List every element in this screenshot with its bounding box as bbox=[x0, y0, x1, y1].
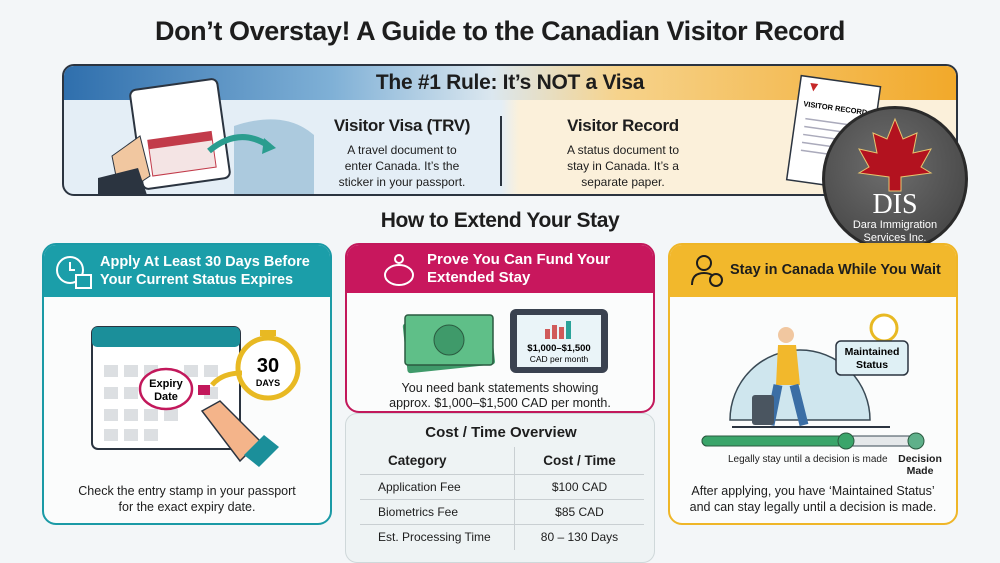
caption: approx. $1,000–$1,500 CAD per month. bbox=[389, 396, 611, 410]
text: visitor visa: A travel document to bbox=[347, 143, 457, 157]
icon: person check bbox=[691, 255, 723, 287]
text: visitor record: stay in Canada. It’s a bbox=[567, 159, 679, 173]
progress labels: Legally stay until a decision is made bbox=[728, 454, 888, 465]
text: visitor visa: Visitor Visa (TRV) bbox=[334, 116, 470, 135]
title: Don’t Overstay! A Guide to the Canadian Visitor Record bbox=[155, 16, 845, 46]
banner heading bbox=[64, 66, 956, 100]
table: $85 CAD bbox=[555, 505, 604, 519]
caption: and can stay legally until a decision is made. bbox=[690, 500, 936, 514]
table: Biometrics Fee bbox=[378, 505, 458, 519]
header: Apply At Least 30 Days Before bbox=[100, 254, 310, 270]
illustration: calendar with stopwatch: 30 bbox=[257, 355, 279, 377]
panel: prove funds bbox=[345, 243, 655, 413]
header bbox=[44, 245, 330, 297]
text: visitor visa: sticker in your passport. bbox=[339, 175, 465, 189]
text: visitor visa: enter Canada. It’s the bbox=[345, 159, 459, 173]
text: visitor record: separate paper. bbox=[581, 175, 665, 189]
illustration: visitor record document: VISITOR RECORD bbox=[803, 99, 868, 117]
header bbox=[347, 245, 653, 293]
logo: Dara Immigration Services: DIS bbox=[872, 189, 918, 220]
header: Your Current Status Expires bbox=[100, 272, 293, 288]
caption: You need bank statements showing bbox=[402, 381, 598, 395]
panel: the #1 rule banner bbox=[62, 64, 958, 196]
illustration: money and tablet: $1,000–$1,500 bbox=[527, 343, 591, 354]
illustration: calendar with stopwatch: Expiry bbox=[149, 378, 184, 390]
panel: stay while you wait: Made bbox=[907, 465, 933, 477]
text: visitor visa bbox=[334, 116, 470, 189]
caption bbox=[389, 381, 611, 410]
table bbox=[360, 447, 644, 550]
caption: Check the entry stamp in your passport bbox=[78, 484, 296, 498]
header: Stay in Canada While You Wait bbox=[730, 262, 941, 278]
logo: Dara Immigration Services bbox=[822, 106, 968, 252]
header bbox=[670, 245, 956, 297]
illustration: traveller under dome: Status bbox=[856, 359, 888, 371]
caption bbox=[78, 484, 296, 514]
logo: Dara Immigration Services: Services Inc. bbox=[864, 232, 926, 244]
illustration: calendar with stopwatch: Date bbox=[154, 391, 178, 403]
heading: how to extend: How to Extend Your Stay bbox=[381, 209, 619, 232]
progress bar bbox=[702, 432, 924, 450]
table: Application Fee bbox=[378, 480, 461, 494]
logo: Dara Immigration Services: Dara Immigration bbox=[853, 219, 937, 231]
icon: piggy bank bbox=[384, 254, 414, 286]
panel: cost / time overview table: Cost / Time Overview bbox=[425, 424, 577, 441]
table: Est. Processing Time bbox=[378, 530, 491, 544]
header: Extended Stay bbox=[427, 269, 530, 286]
illustration: money and tablet bbox=[402, 309, 608, 374]
table: Category bbox=[388, 453, 447, 468]
text: visitor record: Visitor Record bbox=[567, 116, 679, 135]
text: visitor record bbox=[567, 116, 679, 189]
table: Cost / Time bbox=[543, 453, 616, 468]
illustration: calendar with stopwatch bbox=[91, 326, 300, 467]
illustration: money and tablet: CAD per month bbox=[530, 354, 589, 364]
illustration: traveller under dome: Maintained bbox=[845, 346, 899, 358]
table: $100 CAD bbox=[552, 480, 607, 494]
caption: After applying, you have ‘Maintained Status’ bbox=[691, 484, 935, 498]
panel: cost / time overview table bbox=[345, 413, 655, 563]
caption: for the exact expiry date. bbox=[119, 500, 255, 514]
panel: stay while you wait bbox=[668, 243, 958, 525]
illustration: traveller under dome bbox=[729, 314, 909, 428]
illustration: visitor record document bbox=[786, 74, 882, 186]
header: Prove You Can Fund Your bbox=[427, 251, 610, 268]
illustration: passport with visa and Canada map bbox=[98, 78, 314, 194]
illustration: calendar with stopwatch: DAYS bbox=[256, 378, 280, 388]
table: 80 – 130 Days bbox=[541, 530, 618, 544]
panel: stay while you wait: Decision bbox=[898, 453, 942, 465]
panel: apply 30 days bbox=[42, 243, 332, 525]
text: visitor record: A status document to bbox=[567, 143, 679, 157]
caption bbox=[690, 484, 936, 514]
icon: clock calendar bbox=[56, 256, 92, 289]
banner heading: The #1 Rule: It’s NOT a Visa bbox=[376, 71, 644, 94]
